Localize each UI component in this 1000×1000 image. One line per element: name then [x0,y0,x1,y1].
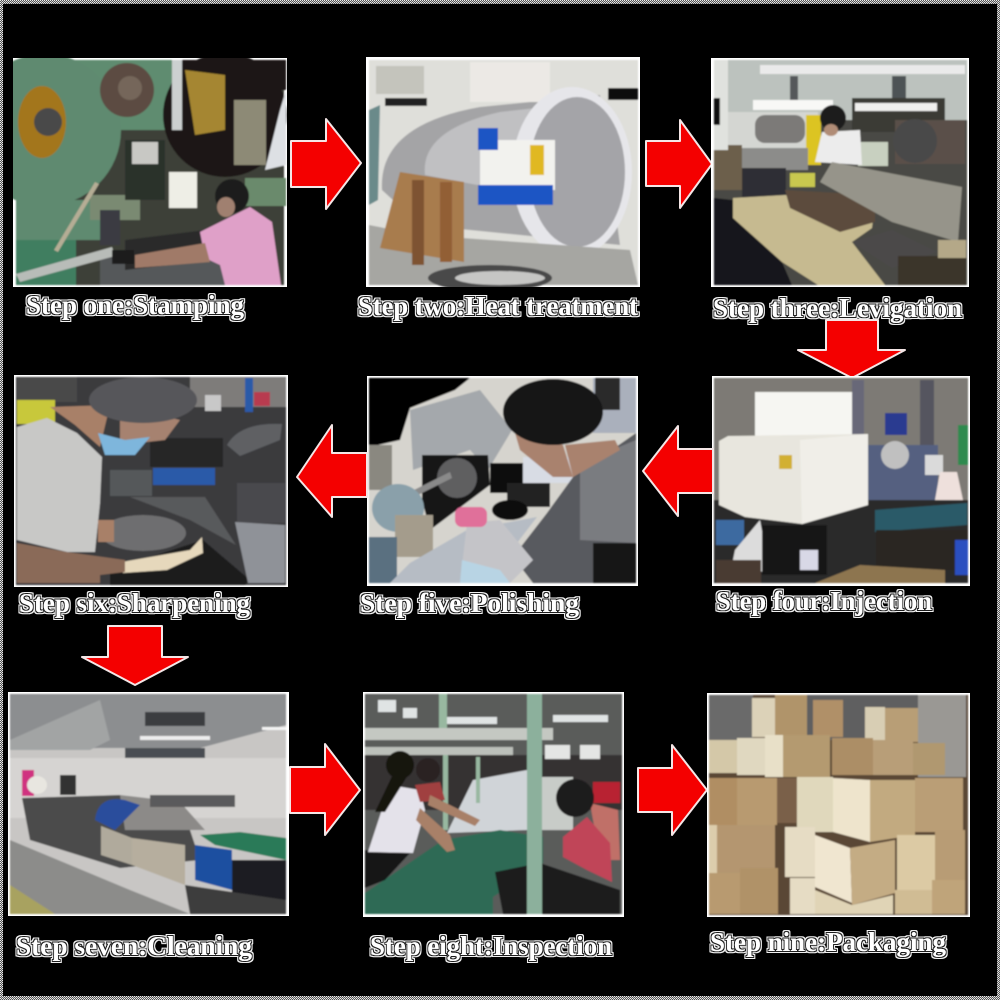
arrow: step seven to eight [290,744,360,835]
label: step five: Step five:Polishing [360,588,580,618]
panel: step seven cleaning photo [8,692,289,916]
label: step seven: Step seven:Cleaning [16,931,252,961]
panel: step six sharpening photo [14,375,288,587]
panel: step four injection photo [712,376,970,586]
panel: step eight inspection photo [363,692,624,917]
panel: step one stamping photo [13,58,287,287]
label: step two: Step two:Heat treatment [358,291,638,321]
arrow: step three to four [798,320,905,378]
arrow: step two to three [646,120,712,208]
panel: step three levigation photo [711,58,969,287]
arrow: step five to six [297,425,367,517]
label: step four: Step four:Injection [716,586,932,616]
arrow: step four to five [643,426,713,516]
arrow: step eight to nine [638,745,707,835]
label: step three: Step three:Levigation [713,293,962,323]
label: step one: Step one:Stamping [26,290,244,320]
panel: step nine packaging photo [707,693,970,917]
arrow: step one to two [291,119,361,209]
panel: step two heat treatment photo [366,57,640,287]
label: step six: Step six:Sharpening [19,588,250,618]
label: step nine: Step nine:Packaging [710,927,946,957]
arrow: step six to seven [82,626,188,685]
panel: step five polishing photo [367,376,638,586]
label: step eight: Step eight:Inspection [370,931,612,961]
